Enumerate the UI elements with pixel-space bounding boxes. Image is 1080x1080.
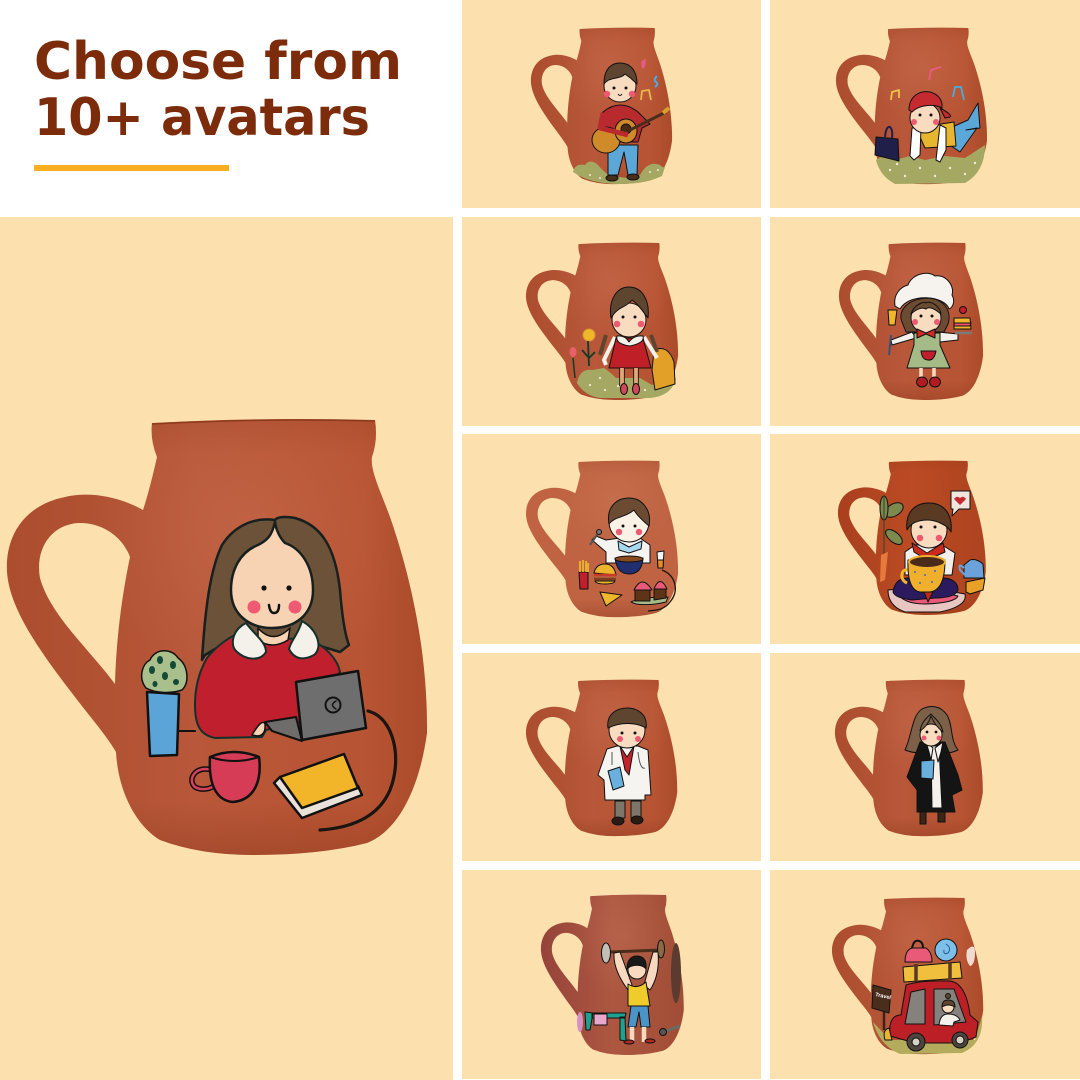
panel: lawyer mug [770, 653, 1080, 861]
mug body [541, 895, 684, 1055]
avatar: girl, flowers and dog [570, 287, 676, 398]
collar [233, 623, 266, 659]
avatar: lawyer [905, 707, 962, 824]
avatar: foodie with burger and cupcakes [579, 498, 675, 611]
avatar: breakdancer with radio [875, 67, 985, 184]
mug body [531, 28, 672, 184]
book [274, 777, 362, 818]
panel: food lover mug [462, 434, 761, 644]
avatar: weightlifter [577, 940, 681, 1044]
avatar: tea lover on rug [880, 491, 985, 612]
title [34, 32, 402, 148]
avatar: guitarist [573, 58, 669, 184]
sign text: Travel [875, 992, 892, 1001]
cord [320, 711, 396, 830]
red sweater [195, 635, 340, 738]
panel: breakdancer mug [770, 0, 1080, 208]
mug body [526, 461, 678, 617]
panel: chef mug [770, 217, 1080, 426]
mug body [839, 243, 983, 400]
panel: guitarist mug [462, 0, 761, 208]
avatar: doctor [598, 708, 651, 825]
mug body [838, 461, 986, 615]
panel: doctor mug [462, 653, 761, 861]
avatar: chef with cake [888, 273, 972, 387]
panel: weightlifter mug [462, 870, 761, 1079]
title: Choose from [34, 32, 402, 92]
avatar: woman at laptop [142, 517, 396, 830]
cup [192, 769, 214, 789]
panel: traveller mug [770, 870, 1080, 1079]
panel: girl with dog mug [462, 217, 761, 426]
mug body [526, 680, 677, 836]
title: 10+ avatars [34, 88, 370, 148]
mug body [7, 419, 427, 855]
plant [147, 692, 179, 756]
mug body [526, 243, 678, 400]
title underline [34, 165, 229, 171]
mug body [832, 898, 983, 1054]
avatar: traveller in red car [872, 939, 982, 1054]
panel: tea lover mug [770, 434, 1080, 644]
laptop [265, 717, 302, 741]
mug body [836, 28, 987, 184]
title block [34, 32, 402, 171]
panel: large featured mug [0, 217, 453, 1080]
mug body [835, 680, 983, 836]
